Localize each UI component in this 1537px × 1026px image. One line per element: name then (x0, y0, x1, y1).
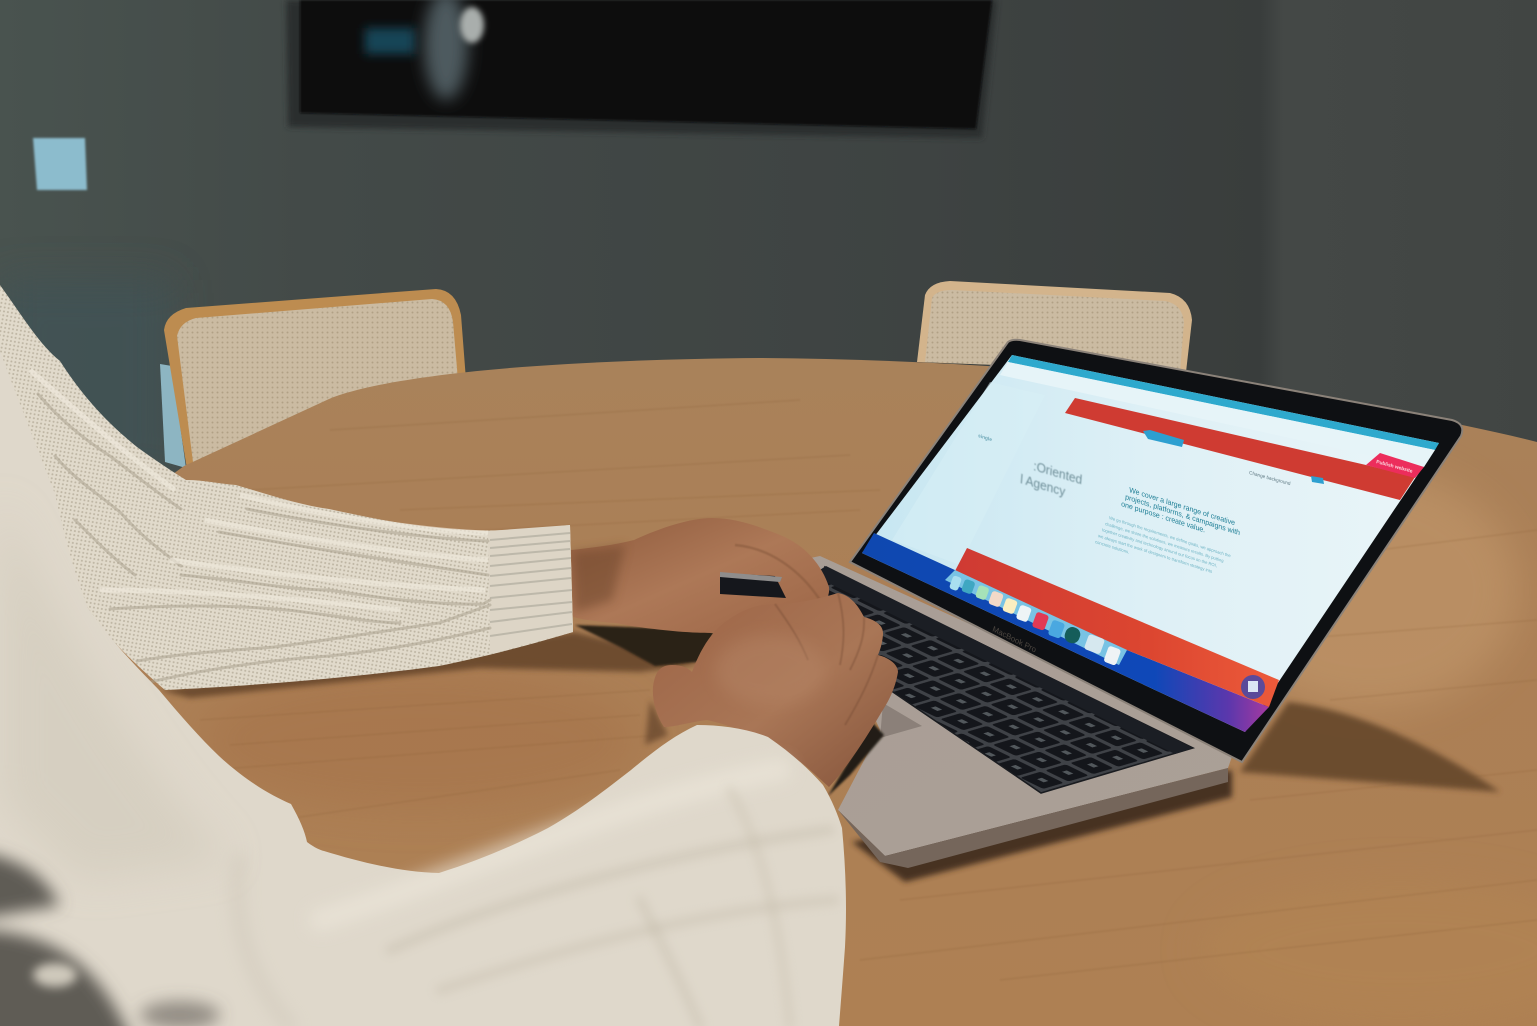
laptop (575, 340, 1462, 868)
screen body paragraph: together creativity and technology around our focus on the ROI, (1102, 527, 1217, 568)
browser menu bar (1008, 355, 1439, 450)
browser toolbar (1000, 362, 1435, 467)
screen body paragraph: we always start the work of designers to transform strategy into (1098, 533, 1213, 574)
sleeve rib highlights (30, 370, 488, 610)
laptop cast shadows (160, 632, 1500, 882)
sleeve cuff (488, 525, 573, 654)
keyboard (825, 567, 1193, 793)
laptop base (720, 556, 1236, 856)
bottom red banner (955, 548, 1279, 707)
macbook label: MacBook Pro (991, 624, 1038, 655)
left sidebar (892, 382, 1045, 565)
sweater soft highlights (237, 770, 835, 1026)
upper hand on keyboard (571, 518, 829, 633)
chat bubble icon (1241, 675, 1265, 699)
blue selection button (1143, 430, 1184, 447)
front edge of base (838, 768, 1228, 868)
screen heading second line: l Agency (1020, 472, 1066, 499)
screen body headline: We cover a large range of creative (1129, 485, 1235, 527)
screen lid bezel (850, 340, 1462, 762)
screen body paragraph: concrete solutions. (1095, 539, 1129, 555)
wall-mounted television (286, 0, 997, 138)
knit sweater sleeve (0, 285, 573, 690)
hand shadow on palm rest (828, 722, 884, 796)
screen body paragraph: challenge, we share the solutions, we measure results. By putting (1105, 521, 1224, 564)
screen body headline: one purpose : create value. (1121, 499, 1206, 535)
screen body paragraph: We go through the requirements, we define goals, we approach the (1109, 515, 1231, 559)
torso shading (0, 500, 230, 880)
change background label: Change background (1249, 470, 1291, 487)
application dock (945, 570, 1127, 666)
desktop wallpaper (862, 533, 1269, 732)
small blue tag (1311, 476, 1324, 484)
screen display (862, 355, 1439, 732)
wrist hair shading (573, 545, 625, 612)
sweater dark pattern (0, 850, 220, 1026)
wall light switch (33, 138, 87, 190)
round wooden table (0, 358, 1537, 1026)
right chair (917, 281, 1192, 372)
sidebar bold label: single (978, 433, 992, 443)
publish button: Publish website (1376, 459, 1413, 475)
dark laptop edge under the wrist (575, 625, 720, 666)
lower hand on keyboard (653, 593, 898, 787)
publish button (1366, 453, 1424, 478)
background wall (0, 0, 1537, 480)
screen body headline: projects, platforms, & campaigns with (1125, 492, 1240, 537)
screen body paragraph (1095, 515, 1231, 574)
sweater foreground arm and torso (0, 351, 846, 1026)
trackpad (880, 703, 922, 738)
top red banner (1065, 398, 1415, 500)
touch bar (812, 566, 1193, 754)
keyboard visible between fingers (720, 573, 786, 598)
sleeve ribs (38, 394, 490, 682)
screen heading: :Oriented (1033, 459, 1083, 487)
left chair (160, 289, 466, 475)
